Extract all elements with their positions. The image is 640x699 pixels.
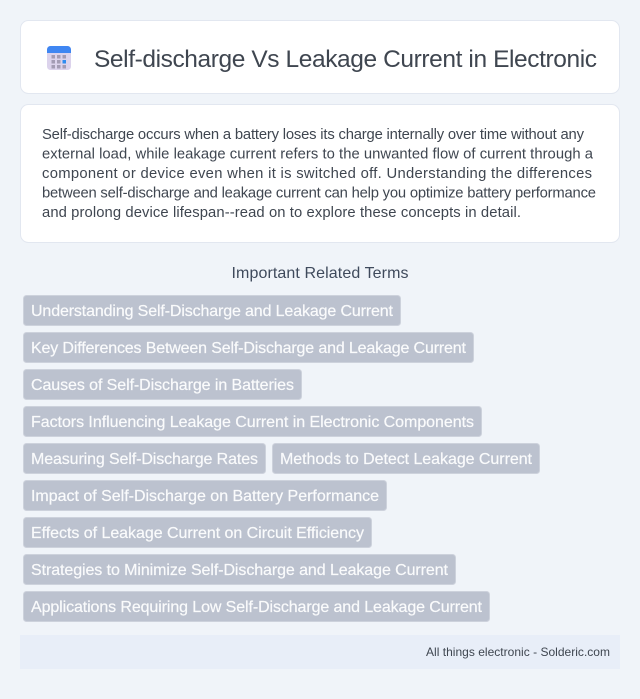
tag: Strategies to Minimize Self-Discharge and Leakage Current (31, 562, 449, 579)
heading: important related terms: Important Related Terms (232, 265, 408, 282)
tag (24, 592, 490, 622)
tag (24, 406, 482, 436)
panel: intro paragraph: Self-discharge occurs when a battery loses its charge internally over time without any (42, 127, 585, 143)
tag: Measuring Self-Discharge Rates (31, 451, 258, 468)
tag (24, 518, 372, 548)
footer: All things electronic - Solderic.com (426, 645, 610, 659)
panel: intro paragraph (20, 104, 620, 242)
tag (24, 480, 386, 510)
tag (24, 370, 302, 400)
tag: Effects of Leakage Current on Circuit Efficiency (31, 525, 364, 542)
tag list (24, 296, 540, 622)
tag (24, 444, 266, 474)
tag: Causes of Self-Discharge in Batteries (31, 377, 294, 394)
panel: intro paragraph: external load, while leakage current refers to the unwanted flow of current through a (42, 146, 594, 162)
tag (24, 296, 400, 326)
tag: Impact of Self-Discharge on Battery Performance (31, 488, 379, 505)
tag: Applications Requiring Low Self-Discharge and Leakage Current (31, 599, 483, 616)
tag (272, 444, 540, 474)
footer (20, 635, 620, 669)
header panel (20, 20, 620, 94)
tag: Factors Influencing Leakage Current in Electronic Components (31, 414, 474, 431)
panel: intro paragraph: between self-discharge and leakage current can help you optimize battery performance (42, 186, 596, 202)
tag (24, 332, 474, 362)
title: Self-discharge Vs Leakage Current in Electronic (94, 46, 597, 73)
tag: Methods to Detect Leakage Current (280, 451, 533, 468)
panel: intro paragraph: and prolong device lifespan--read on to explore these concepts in detail. (42, 205, 521, 221)
tag (24, 554, 456, 584)
tag: Understanding Self-Discharge and Leakage Current (31, 303, 394, 320)
panel: intro paragraph: component or device even when it is switched off. Understanding the differences (42, 166, 592, 182)
tag: Key Differences Between Self-Discharge and Leakage Current (31, 340, 467, 357)
icon: calendar (47, 46, 71, 70)
